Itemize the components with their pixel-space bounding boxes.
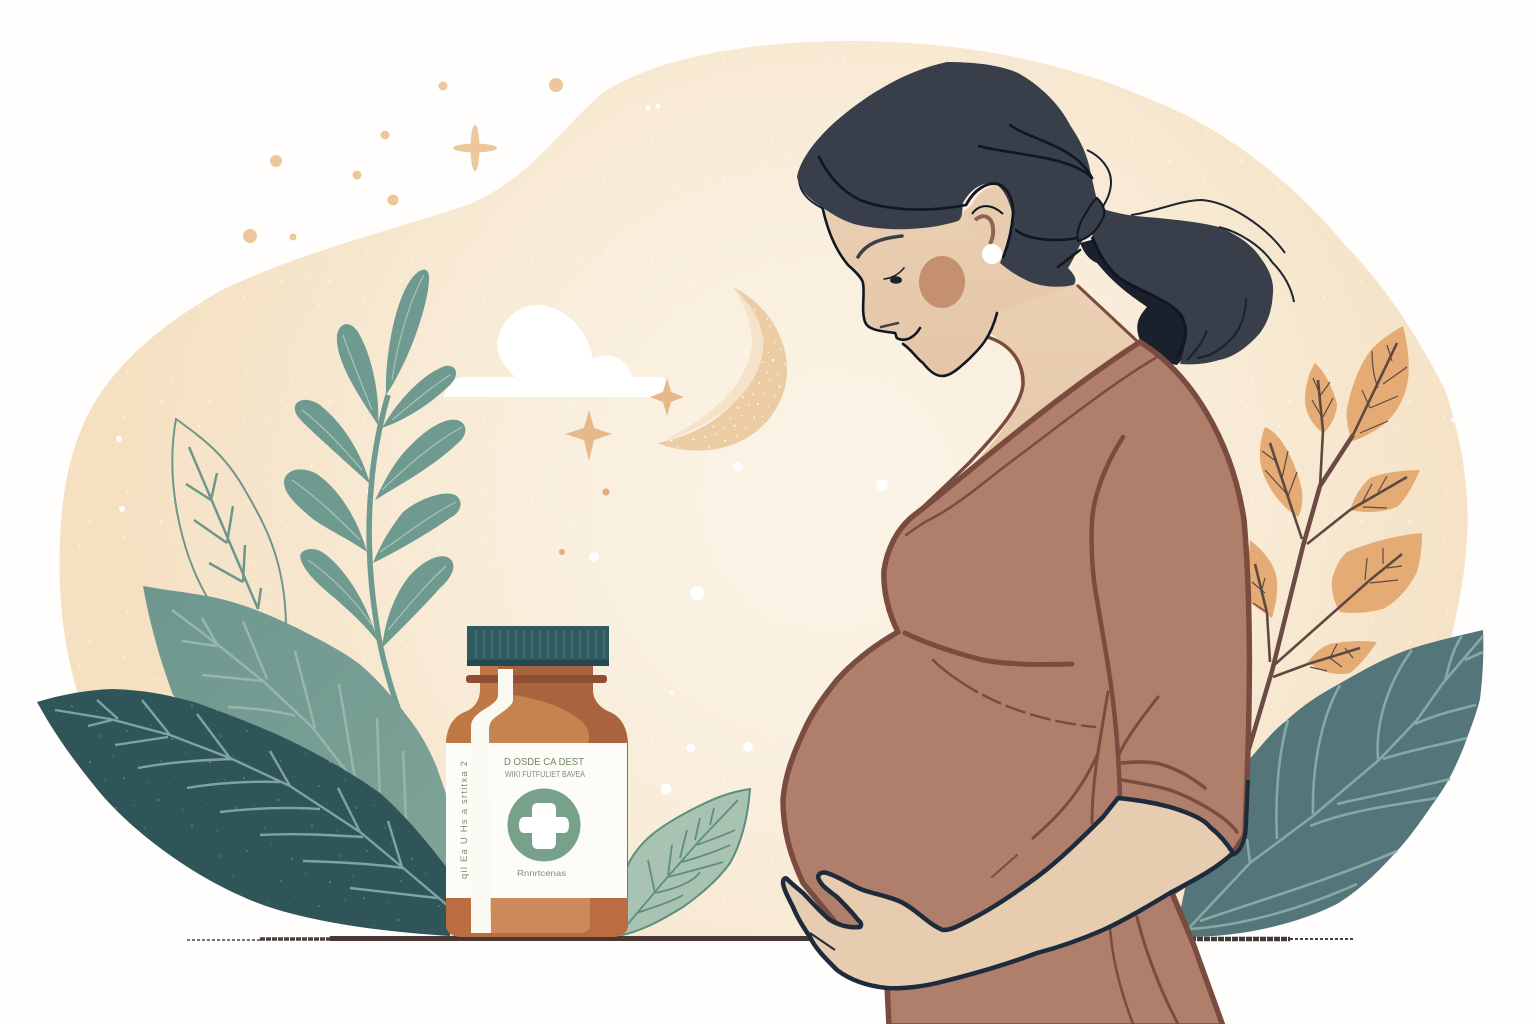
large teal leaf, right	[1178, 630, 1483, 937]
decorative tan dots and sparkle, upper left	[243, 78, 563, 243]
bottle collar	[466, 675, 607, 683]
woman figure	[783, 62, 1294, 1024]
bottle body	[446, 665, 628, 937]
dress neckline trim and folds	[905, 357, 1237, 1024]
cheek	[919, 256, 965, 308]
hair band	[1077, 198, 1104, 241]
label footer text: Rnnrtcenas	[517, 868, 566, 878]
orange leaf branch, right	[1245, 326, 1422, 752]
white and tan floating dots	[116, 104, 1455, 794]
cap	[467, 626, 609, 666]
cloud	[443, 305, 667, 397]
icon: green cross	[508, 788, 580, 862]
supplement bottle	[446, 626, 628, 937]
eye	[884, 268, 904, 284]
face	[822, 180, 1077, 376]
dress	[783, 342, 1249, 1024]
dark teal leaf, left	[37, 689, 450, 936]
neck and chest skin	[905, 280, 1150, 530]
arm and hand	[783, 798, 1233, 988]
ear	[966, 184, 1013, 258]
crescent moon	[657, 287, 787, 451]
back of neck line	[1077, 285, 1138, 342]
bottom band	[446, 898, 628, 937]
neck outline	[917, 337, 1023, 513]
sage sprig	[284, 270, 465, 714]
earring	[982, 244, 1002, 264]
left shoulder tint	[446, 665, 498, 745]
sparkle stars near cloud	[565, 378, 684, 461]
label heading text: D OSDE CA DEST	[504, 756, 585, 768]
eyebrow	[858, 236, 902, 257]
ground line	[187, 936, 1355, 941]
bottle highlights	[489, 695, 589, 745]
hair strands	[819, 125, 1092, 267]
hair	[797, 62, 1111, 287]
outline leaf, left	[172, 419, 286, 625]
vertical label text: qil Ea U Hs a srtitxa 2	[459, 761, 470, 879]
large sage leaf, left	[143, 586, 450, 890]
nose line	[881, 323, 898, 327]
sleeve hem dark edge	[1230, 780, 1248, 855]
ponytail	[1080, 200, 1294, 365]
white strip	[471, 669, 513, 933]
label	[446, 743, 627, 898]
small pale leaf beside bottle	[622, 789, 750, 935]
label sub text: WIKI FUTFULIET BAVEA	[505, 770, 586, 779]
